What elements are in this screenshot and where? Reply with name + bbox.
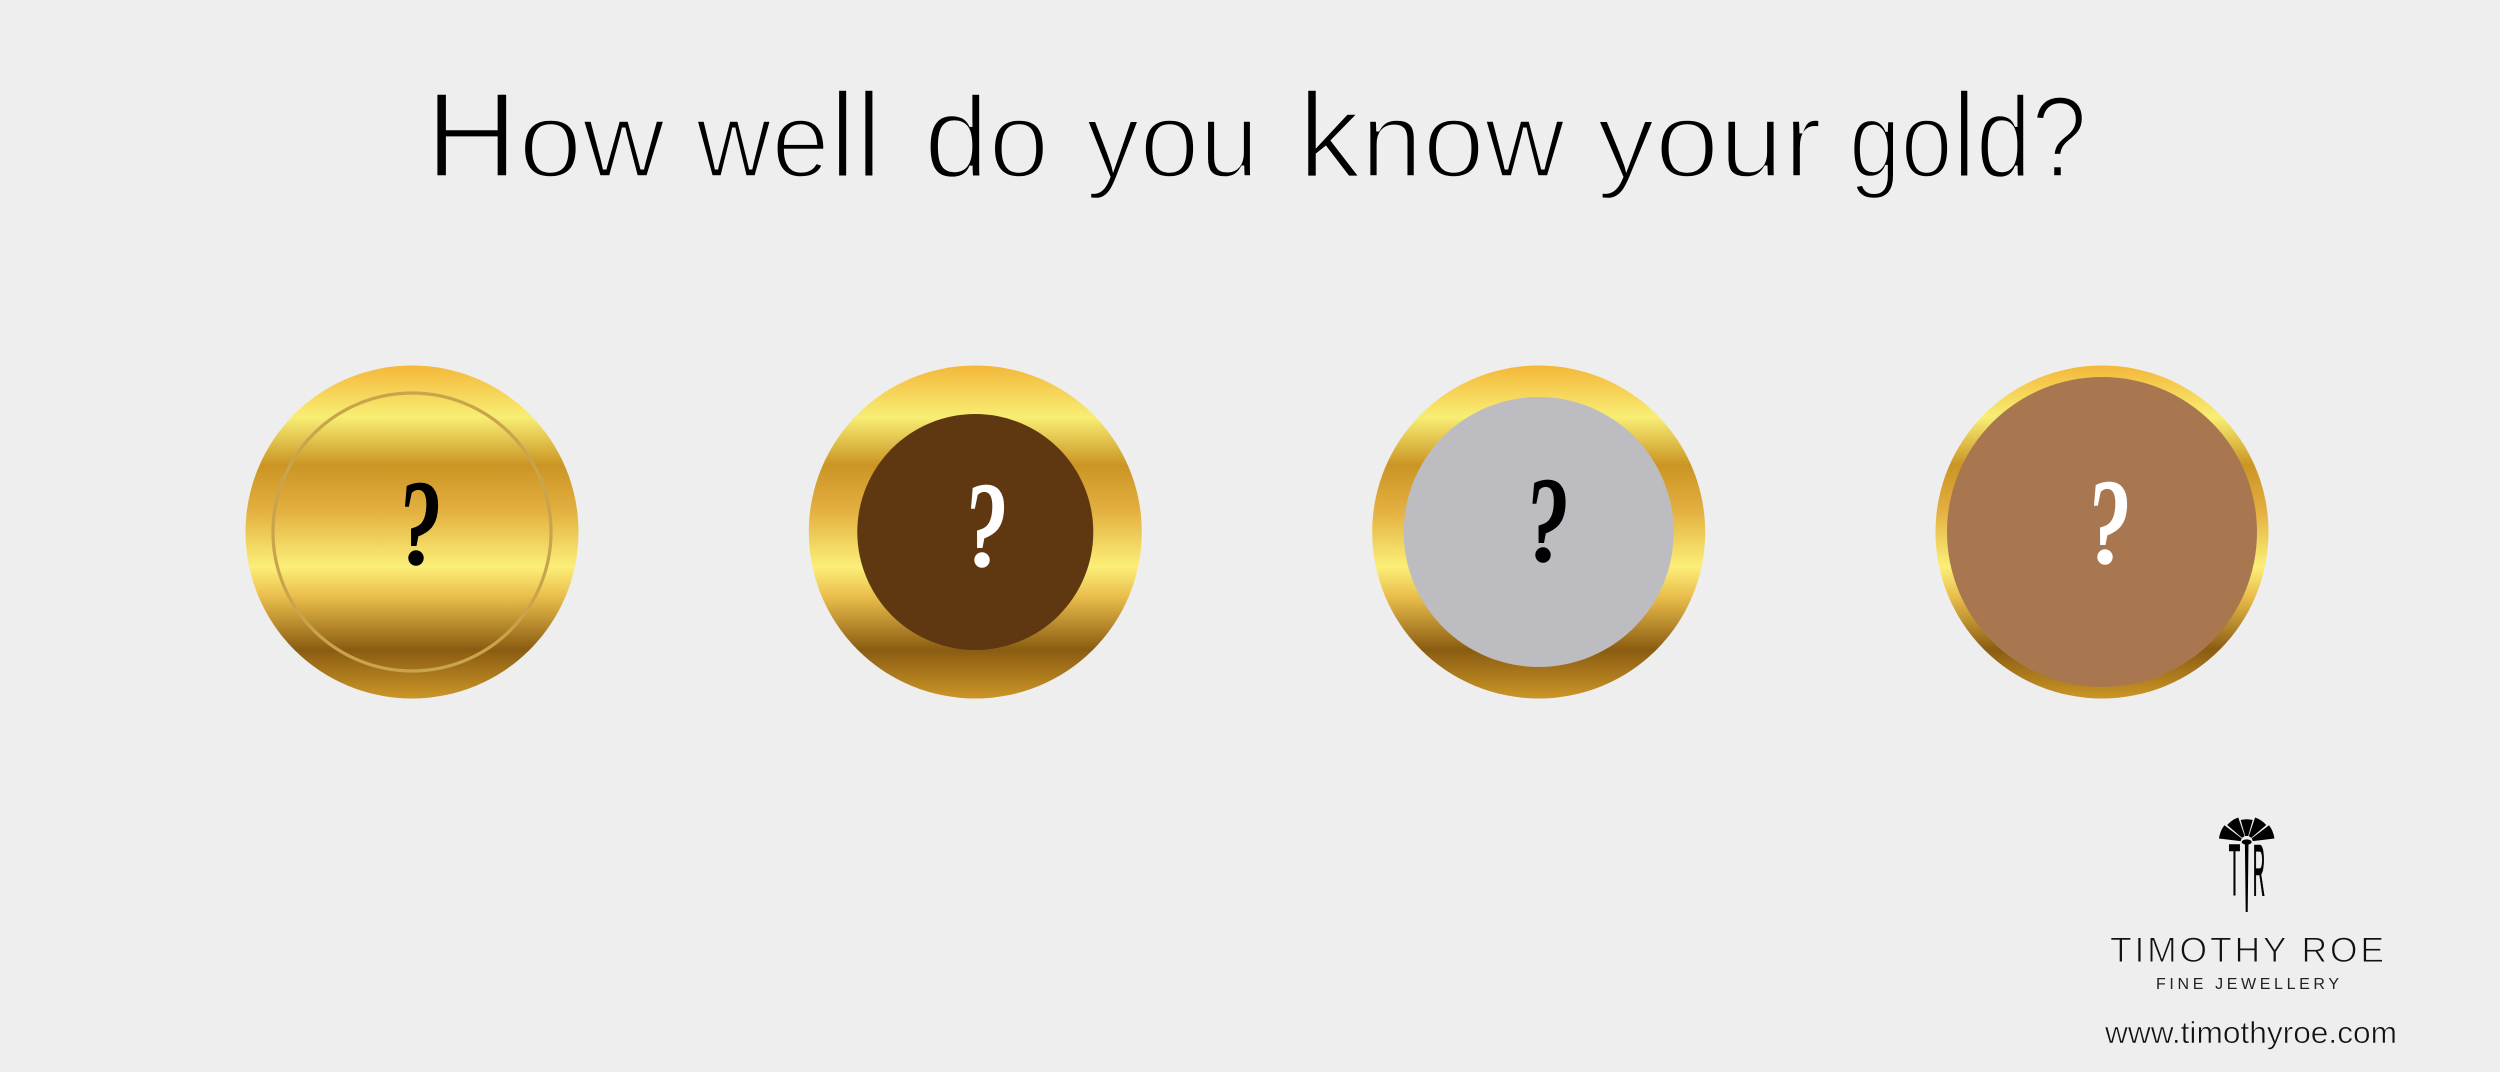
title: gold? <box>1849 67 2087 203</box>
question mark: ? <box>1524 446 1569 606</box>
website: www.timothyroe.com <box>2104 1015 2397 1050</box>
logo: Timothy Roe <box>2104 817 2397 1050</box>
silver centre <box>1404 397 1674 667</box>
title: know <box>1298 67 1566 203</box>
title: How <box>425 67 666 203</box>
title: well <box>695 67 882 203</box>
question mark: ? <box>2086 448 2130 608</box>
icon: fan monogram <box>2218 817 2275 912</box>
icon: fan monogram: T <box>2229 831 2240 911</box>
brown centre <box>857 414 1093 650</box>
ring <box>273 393 551 671</box>
coin 1: solid gold with engraved ring <box>246 366 578 698</box>
question mark: ? <box>963 451 1007 611</box>
copper centre <box>1947 377 2257 687</box>
question mark: ? <box>397 449 441 609</box>
question mark <box>1532 480 1566 563</box>
title: your <box>1597 79 1822 200</box>
title: do <box>924 72 1049 202</box>
coin 3: gold with silver centre <box>1372 366 1705 698</box>
question mark <box>405 482 438 566</box>
title: you <box>1086 79 1259 200</box>
icon: fan monogram: R <box>2253 832 2265 912</box>
brand name: TIMOTHY ROE <box>2110 930 2384 970</box>
question mark <box>2094 482 2128 565</box>
coin 2: gold with brown centre <box>809 366 1142 698</box>
coin 4: gold with copper centre <box>1936 366 2268 698</box>
question mark <box>971 484 1004 568</box>
tagline: FINE JEWELLERY <box>2156 976 2339 993</box>
title <box>425 67 2087 203</box>
